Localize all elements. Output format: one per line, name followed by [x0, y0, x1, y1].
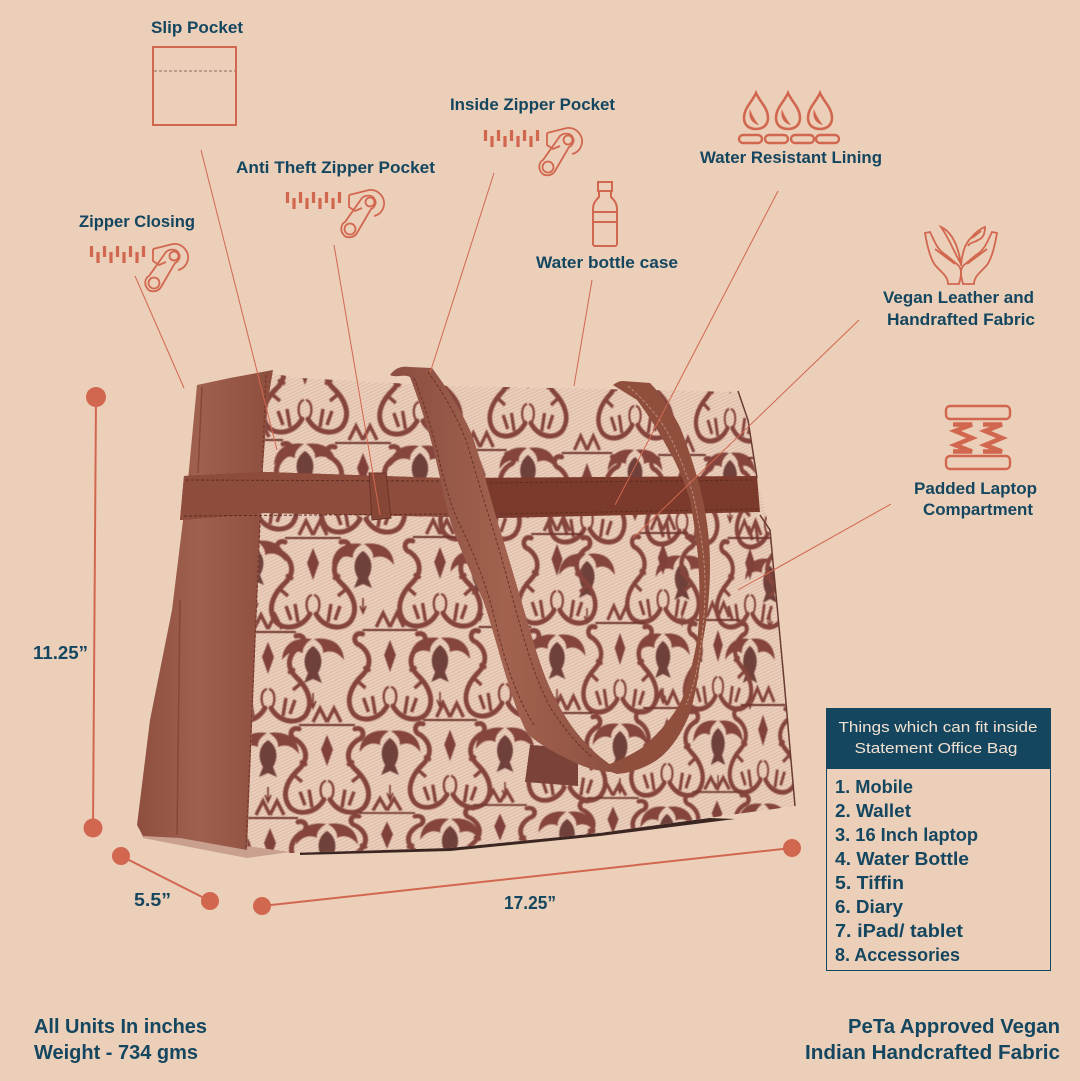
dimension: height [84, 387, 106, 838]
list of items: 7. iPad/ tablet [835, 921, 963, 941]
list of items: 5. Tiffin [835, 873, 904, 893]
footer: certification: Indian Handcrafted Fabric [805, 1042, 1060, 1064]
footer: certification: PeTa Approved Vegan [848, 1016, 1060, 1038]
label: inside zipper pocket: Inside Zipper Pocket [450, 95, 615, 114]
fabric motif pattern [247, 375, 793, 853]
leader: zipper closing [135, 276, 184, 388]
leader lines [135, 150, 891, 590]
label: padded laptop compartment: Compartment [923, 500, 1033, 519]
header text [838, 719, 1038, 757]
front strap [390, 367, 622, 772]
belt left lighter section [180, 472, 452, 520]
list of items: 8. Accessories [835, 945, 960, 965]
dimension: depth [112, 847, 219, 910]
back strap stitching [628, 386, 705, 705]
icon: laptop padding springs [946, 406, 1010, 469]
label: vegan leather and handcrafted fabric [883, 288, 1035, 329]
leather side panel [137, 370, 273, 850]
belt keeper loop [369, 473, 391, 520]
list of items: 4. Water Bottle [835, 849, 969, 869]
dimension: width [253, 839, 801, 915]
side panel stitching [246, 375, 266, 848]
icon: closing zipper [92, 244, 188, 291]
leader: slip pocket [201, 150, 277, 450]
belt stitching [184, 480, 758, 516]
footer: certification [805, 1016, 1060, 1064]
label: width value: 17.25” [504, 893, 556, 913]
fabric front panel [247, 373, 795, 853]
side panel seam [177, 387, 202, 835]
back strap [600, 381, 710, 774]
leader: anti theft pocket [334, 245, 380, 515]
icon: water drops [739, 93, 839, 143]
list of items: 2. Wallet [835, 801, 911, 821]
strap stitching [414, 372, 592, 757]
header text: Statement Office Bag [854, 740, 1018, 757]
panel: things which can fit inside [826, 708, 1051, 970]
list of items: 6. Diary [835, 897, 903, 917]
label: anti theft zipper pocket: Anti Theft Zipper Pocket [236, 158, 435, 177]
bag bottom shadow [300, 818, 735, 855]
label: padded laptop compartment: Padded Laptop [914, 479, 1037, 498]
panel border [826, 708, 1050, 970]
leather belt [180, 472, 760, 520]
bottom fabric sliver [138, 825, 290, 858]
footer: units and weight: Weight - 734 gms [34, 1042, 198, 1064]
icon: slip pocket [153, 47, 236, 125]
icon: inside zipper [486, 128, 582, 175]
list of items [835, 777, 978, 965]
leader: inside zipper pocket [430, 173, 494, 373]
icon: water bottle [593, 182, 617, 246]
label: vegan leather and handcrafted fabric: Handrafted Fabric [887, 310, 1035, 329]
footer: units and weight: All Units In inches [34, 1016, 207, 1038]
label: depth value: 5.5” [134, 890, 171, 910]
label: water resistant lining: Water Resistant Lining [700, 148, 882, 167]
leader: vegan leather [633, 320, 859, 538]
leader: padded compartment [738, 504, 891, 590]
leader: water resistant lining [615, 191, 778, 505]
label: padded laptop compartment [914, 479, 1037, 519]
panel header [826, 708, 1051, 769]
list of items: 3. 16 Inch laptop [835, 825, 978, 845]
bag illustration [137, 366, 796, 858]
leader: water bottle case [574, 280, 592, 386]
label: vegan leather and handcrafted fabric: Vegan Leather and [883, 288, 1034, 307]
label: height value: 11.25” [33, 643, 88, 663]
footer: units and weight [34, 1016, 207, 1064]
header text: Things which can fit inside [838, 719, 1038, 736]
icon: hands with plant [925, 227, 997, 284]
list of items: 1. Mobile [835, 777, 913, 797]
icon: anti theft zipper [288, 190, 384, 237]
label: slip pocket: Slip Pocket [151, 18, 243, 37]
leather patch label [525, 745, 578, 786]
right edge trim [738, 391, 795, 806]
label: water bottle case: Water bottle case [536, 253, 678, 272]
label: zipper closing: Zipper Closing [79, 212, 195, 231]
